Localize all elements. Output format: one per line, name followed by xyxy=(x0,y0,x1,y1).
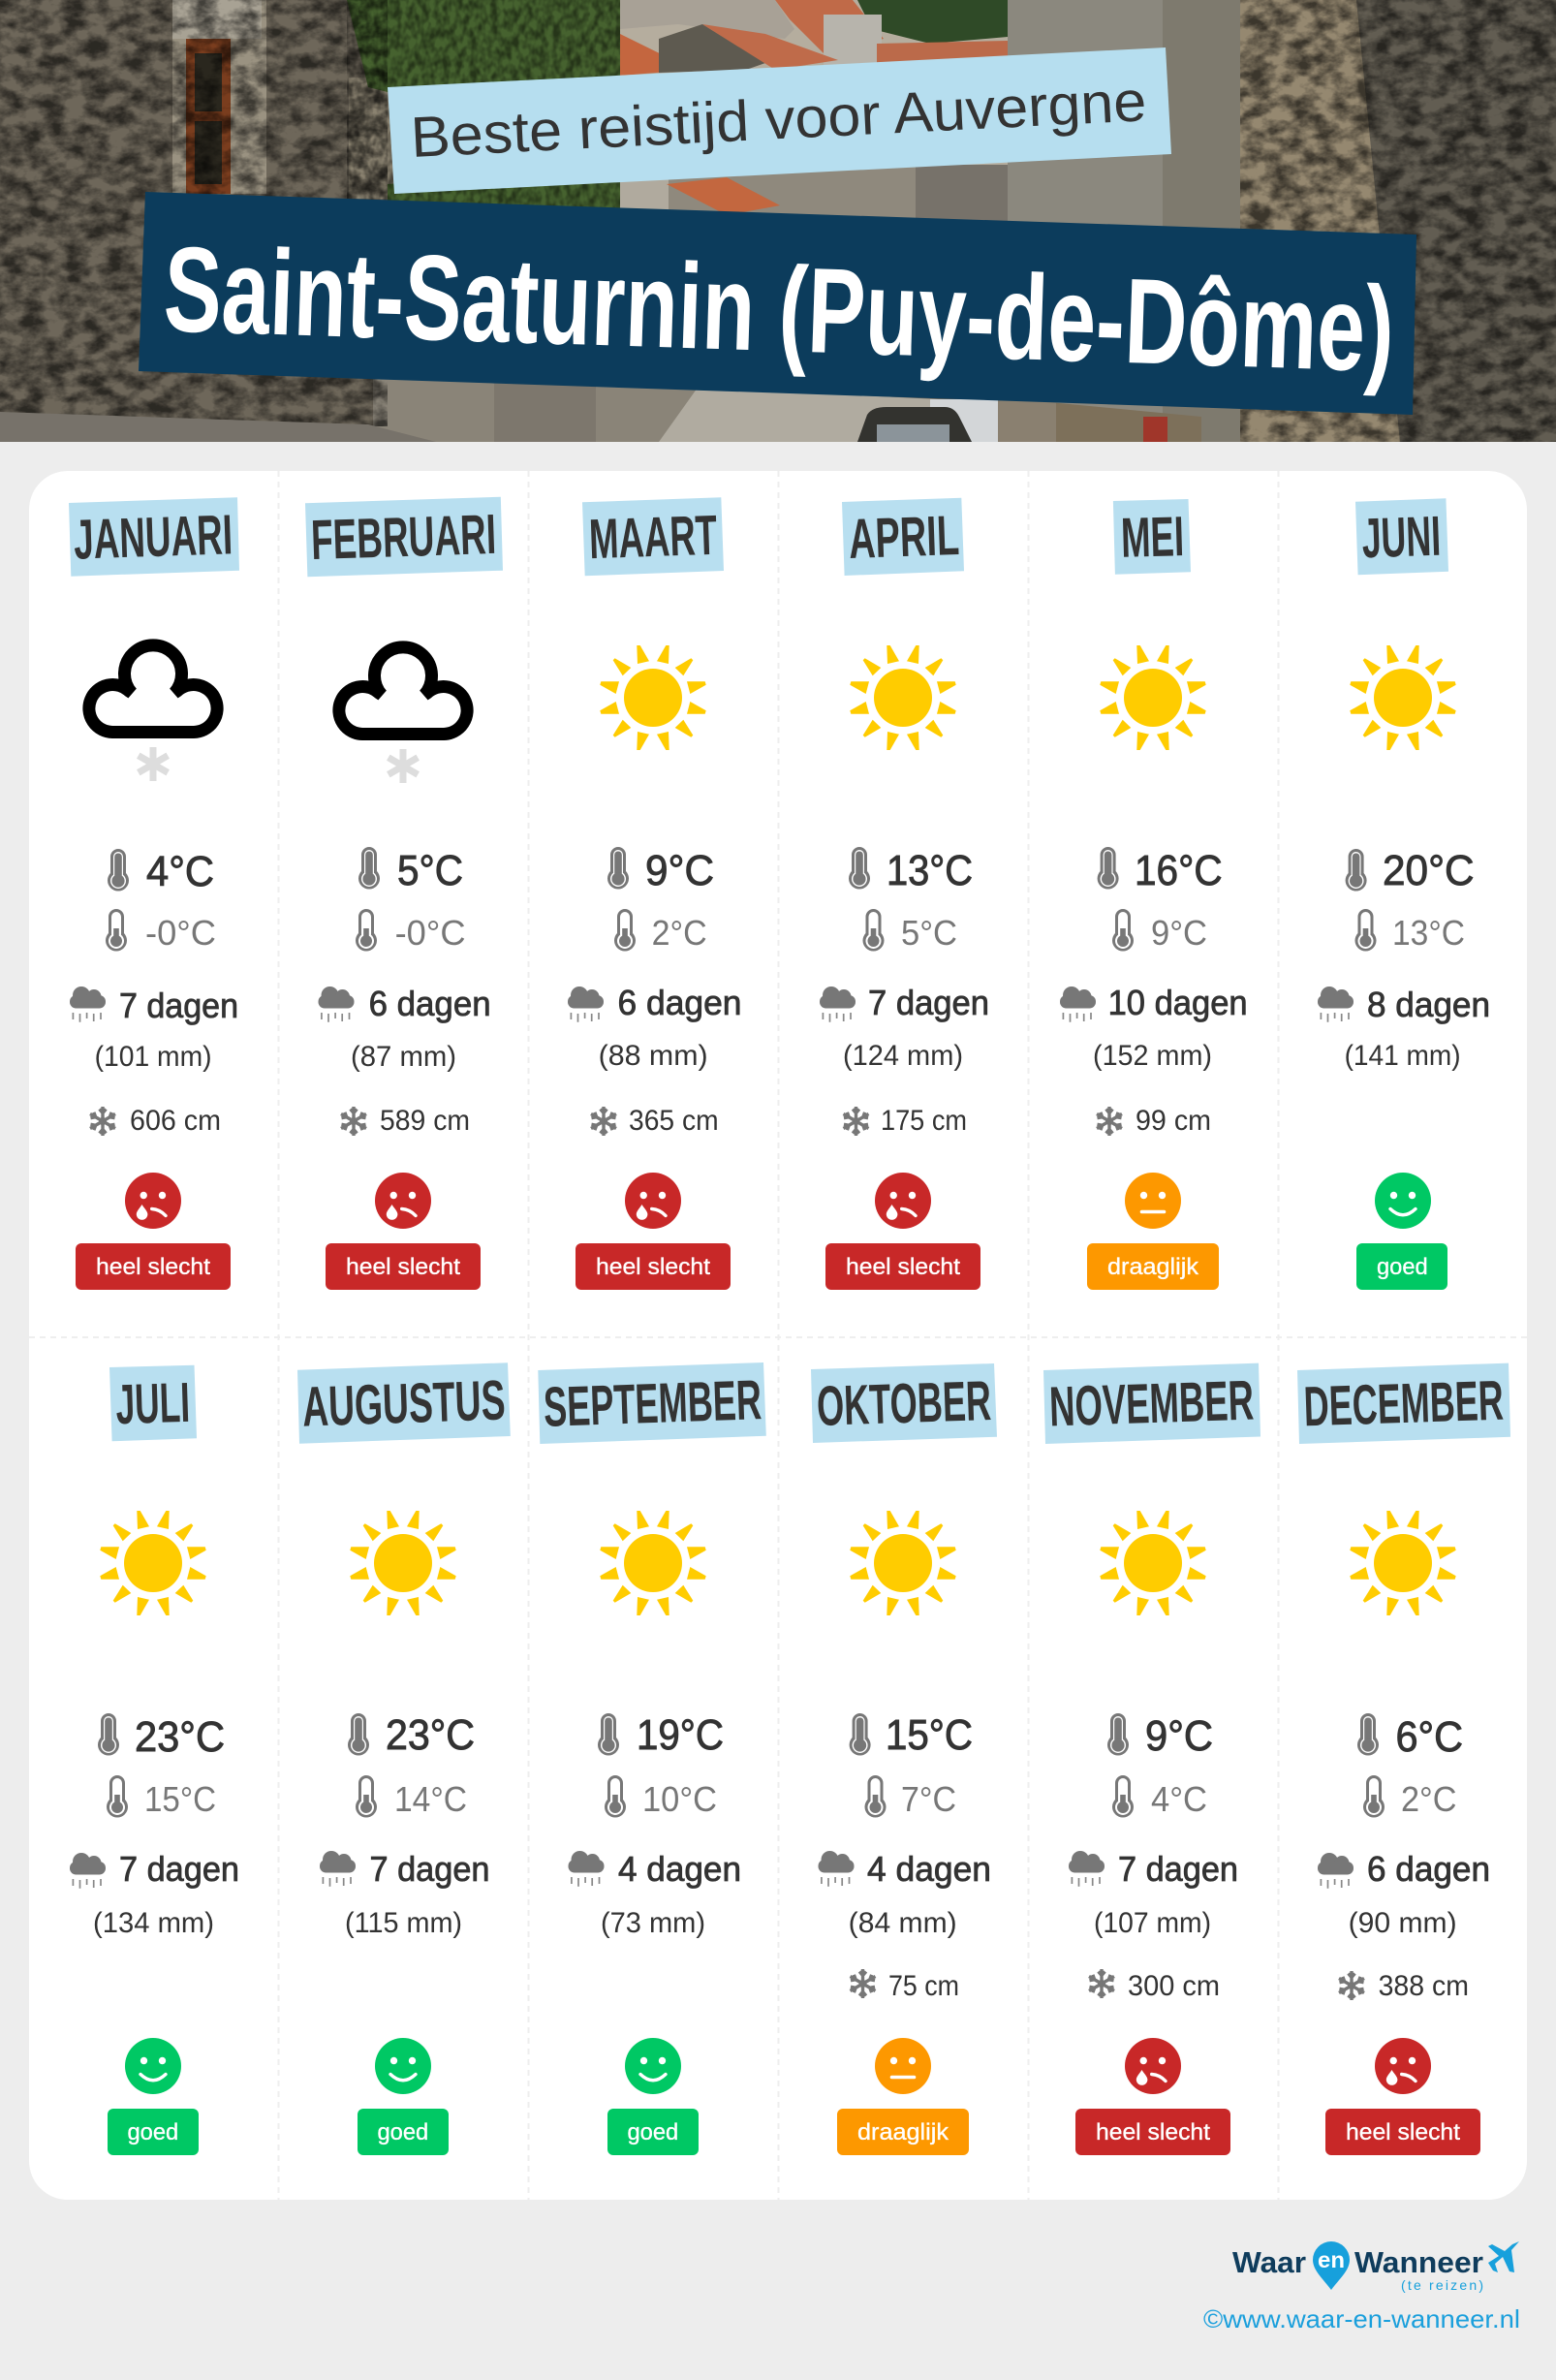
low temperature: 14°C xyxy=(394,1779,467,1819)
panel: months card xyxy=(29,471,1527,2200)
high temperature xyxy=(1357,1713,1463,1761)
rain days: 7 dagen xyxy=(119,986,238,1025)
high temperature xyxy=(1107,1712,1213,1760)
low temperature xyxy=(1112,1775,1207,1819)
high temperature: 16°C xyxy=(1135,847,1223,894)
rainfall: (73 mm) xyxy=(601,1907,705,1939)
snowfall xyxy=(88,1105,221,1137)
heading: mei: MEI xyxy=(1120,505,1185,570)
heading: januari: JANUARI xyxy=(73,503,233,572)
month: maart xyxy=(568,497,742,1290)
month: augustus xyxy=(297,1362,511,2155)
heading: september: SEPTEMBER xyxy=(543,1368,762,1439)
snowfall: 365 cm xyxy=(629,1105,719,1137)
rainfall: (152 mm) xyxy=(1093,1040,1212,1072)
rating: heel slecht xyxy=(76,1173,231,1290)
low temperature: 10°C xyxy=(642,1779,717,1819)
heading: november xyxy=(1043,1363,1260,1444)
rain days: 7 dagen xyxy=(370,1849,490,1889)
rain days: 6 dagen xyxy=(369,984,491,1023)
month: juli xyxy=(70,1365,239,2155)
snowfall xyxy=(842,1105,967,1137)
rainfall: (107 mm) xyxy=(1094,1907,1211,1939)
low temperature: 13°C xyxy=(1392,913,1465,953)
high temperature: 9°C xyxy=(1145,1712,1213,1760)
high temperature xyxy=(849,847,973,894)
low temperature: -0°C xyxy=(395,913,466,953)
rating: draaglijk: draaglijk xyxy=(1107,1254,1199,1280)
rainfall: (84 mm) xyxy=(849,1907,957,1939)
icon: map pin xyxy=(1313,2241,1350,2290)
heading: maart xyxy=(582,497,724,576)
low temperature: -0°C xyxy=(145,913,216,953)
snowfall: 75 cm xyxy=(888,1970,959,2002)
rating: heel slecht: heel slecht xyxy=(846,1254,960,1280)
heading: juni: JUNI xyxy=(1361,505,1442,570)
rainfall: (90 mm) xyxy=(1349,1907,1457,1939)
high temperature: 9°C xyxy=(645,847,714,894)
rating: draaglijk xyxy=(1087,1173,1219,1290)
month: mei xyxy=(1060,499,1248,1290)
high temperature xyxy=(1346,847,1475,894)
low temperature xyxy=(1354,909,1465,953)
heading: november: NOVEMBER xyxy=(1048,1369,1255,1438)
rain days: 10 dagen xyxy=(1108,983,1248,1022)
rainfall: (87 mm) xyxy=(351,1041,456,1073)
rainfall: (115 mm) xyxy=(345,1907,462,1939)
rain days xyxy=(70,986,238,1025)
low temperature: 2°C xyxy=(652,913,707,953)
rain days: 7 dagen xyxy=(868,983,989,1022)
high temperature xyxy=(98,1713,225,1761)
snowfall: 175 cm xyxy=(881,1105,967,1137)
high temperature xyxy=(598,1711,724,1759)
logo: Waar en Wanneer xyxy=(1232,2241,1519,2293)
icon: sun xyxy=(600,645,706,750)
rating: heel slecht xyxy=(1325,2038,1480,2155)
heading: augustus: AUGUSTUS xyxy=(301,1368,507,1439)
website url: ©www.waar-en-wanneer.nl xyxy=(1203,2304,1520,2333)
low temperature: 7°C xyxy=(901,1779,956,1819)
logo: Waar en Wanneer: Wanneer xyxy=(1354,2245,1483,2279)
high temperature: 4°C xyxy=(146,848,214,895)
heading: augustus xyxy=(297,1362,511,1444)
high temperature xyxy=(108,848,214,895)
rain days: 7 dagen xyxy=(1118,1849,1238,1889)
rain days xyxy=(820,983,989,1022)
rating: draaglijk: draaglijk xyxy=(857,2119,949,2145)
rating: goed: goed xyxy=(628,2119,678,2145)
high temperature xyxy=(607,847,714,894)
low temperature xyxy=(862,909,957,953)
heading: januari xyxy=(69,497,239,577)
rating: goed: goed xyxy=(1377,1254,1428,1280)
heading: juli: JULI xyxy=(115,1371,191,1436)
low temperature xyxy=(614,909,707,953)
icon: map pin: en xyxy=(1318,2247,1345,2272)
rating: goed xyxy=(1356,1173,1447,1290)
rainfall: (124 mm) xyxy=(843,1040,963,1072)
rainfall: (141 mm) xyxy=(1345,1040,1461,1072)
month: januari xyxy=(69,497,239,1290)
high temperature xyxy=(850,1711,973,1759)
icon: sun xyxy=(1100,1511,1206,1615)
rating: goed: goed xyxy=(378,2119,428,2145)
heading: maart: MAART xyxy=(588,504,718,571)
rating: heel slecht xyxy=(326,1173,481,1290)
heading: oktober: OKTOBER xyxy=(816,1369,992,1438)
rating: goed xyxy=(358,2038,449,2155)
rain days xyxy=(1069,1849,1238,1889)
heading: april xyxy=(842,498,964,576)
heading: juli xyxy=(109,1365,197,1441)
rating: heel slecht: heel slecht xyxy=(596,1254,710,1280)
rain days xyxy=(320,1849,490,1889)
rating: heel slecht xyxy=(825,1173,980,1290)
rain days: 4 dagen xyxy=(867,1849,991,1889)
rain days: 8 dagen xyxy=(1367,985,1490,1024)
rainfall: (88 mm) xyxy=(599,1040,708,1072)
snowfall: 589 cm xyxy=(380,1105,470,1137)
icon: sun xyxy=(1100,645,1206,750)
month: juni xyxy=(1318,498,1490,1290)
subtitle banner xyxy=(388,47,1171,194)
low temperature: 15°C xyxy=(144,1779,216,1819)
month: september xyxy=(538,1362,766,2155)
heading: april: APRIL xyxy=(848,504,960,571)
heading: februari: FEBRUARI xyxy=(310,503,497,572)
rain days xyxy=(70,1849,239,1889)
icon: cloud with snow xyxy=(89,645,217,781)
high temperature: 13°C xyxy=(887,847,973,894)
low temperature xyxy=(356,1775,467,1819)
low temperature: 9°C xyxy=(1151,913,1207,953)
low temperature: 4°C xyxy=(1151,1779,1207,1819)
heading: september xyxy=(538,1362,766,1444)
rating: heel slecht: heel slecht xyxy=(1096,2119,1210,2145)
rainfall: (101 mm) xyxy=(95,1041,212,1073)
high temperature xyxy=(1098,847,1223,894)
high temperature: 23°C xyxy=(135,1713,225,1761)
rain days xyxy=(318,984,491,1023)
high temperature: 15°C xyxy=(886,1711,973,1759)
low temperature xyxy=(864,1775,956,1819)
high temperature xyxy=(348,1711,475,1759)
rating: heel slecht: heel slecht xyxy=(1346,2119,1460,2145)
logo: Waar en Wanneer: (te reizen) xyxy=(1401,2277,1483,2293)
rain days: 6 dagen xyxy=(1367,1849,1490,1889)
icon: cloud with snow xyxy=(339,647,467,783)
header photo: village street xyxy=(0,0,1556,442)
high temperature: 20°C xyxy=(1383,847,1475,894)
snowfall xyxy=(589,1105,719,1137)
icon: sun xyxy=(850,645,956,750)
rating: heel slecht xyxy=(1075,2038,1230,2155)
rain days: 4 dagen xyxy=(618,1849,741,1889)
low temperature: 5°C xyxy=(901,913,957,953)
rating: draaglijk xyxy=(837,2038,969,2155)
month: februari xyxy=(305,497,503,1290)
low temperature: 2°C xyxy=(1401,1779,1457,1819)
icon: sun xyxy=(350,1511,456,1615)
high temperature: 6°C xyxy=(1395,1713,1463,1761)
logo: Waar en Wanneer: Waar xyxy=(1232,2245,1306,2279)
high temperature: 19°C xyxy=(637,1711,724,1759)
low temperature xyxy=(107,1775,216,1819)
rain days: 7 dagen xyxy=(119,1849,239,1889)
rain days xyxy=(568,1849,741,1889)
low temperature xyxy=(605,1775,717,1819)
snowfall: 300 cm xyxy=(1128,1970,1220,2002)
icon: sun xyxy=(100,1511,206,1615)
snowfall xyxy=(1095,1105,1211,1137)
month: oktober xyxy=(811,1363,997,2155)
high temperature: 5°C xyxy=(397,847,463,894)
snowfall xyxy=(339,1105,470,1137)
heading: oktober xyxy=(811,1363,997,1443)
rainfall: (134 mm) xyxy=(93,1907,214,1939)
month: november xyxy=(1043,1363,1260,2155)
low temperature xyxy=(356,909,466,953)
snowfall xyxy=(1087,1969,1220,2002)
rating: heel slecht xyxy=(576,1173,731,1290)
icon: sun xyxy=(600,1511,706,1615)
snowfall: 388 cm xyxy=(1379,1970,1469,2002)
icon: sun xyxy=(1350,645,1456,750)
rating: goed xyxy=(607,2038,699,2155)
rain days: 6 dagen xyxy=(618,983,742,1022)
month: april xyxy=(820,498,989,1290)
month: december xyxy=(1297,1363,1510,2155)
rating: heel slecht: heel slecht xyxy=(346,1254,460,1280)
rating: goed: goed xyxy=(128,2119,178,2145)
high temperature xyxy=(358,847,463,894)
heading: mei xyxy=(1113,499,1191,575)
heading: februari xyxy=(305,497,503,577)
snowfall xyxy=(1337,1970,1469,2002)
high temperature: 23°C xyxy=(386,1711,475,1759)
snowfall: 606 cm xyxy=(130,1105,221,1137)
heading: juni xyxy=(1355,498,1448,575)
subtitle banner: Beste reistijd voor Auvergne xyxy=(409,69,1148,170)
snowfall xyxy=(849,1969,959,2002)
low temperature xyxy=(1363,1775,1457,1819)
icon: sun xyxy=(850,1511,956,1615)
rating: heel slecht: heel slecht xyxy=(96,1254,210,1280)
snowfall: 99 cm xyxy=(1136,1105,1211,1137)
low temperature xyxy=(106,909,216,953)
rating: goed xyxy=(108,2038,199,2155)
low temperature xyxy=(1112,909,1207,953)
icon: airplane xyxy=(1488,2241,1519,2272)
icon: sun xyxy=(1350,1511,1456,1615)
